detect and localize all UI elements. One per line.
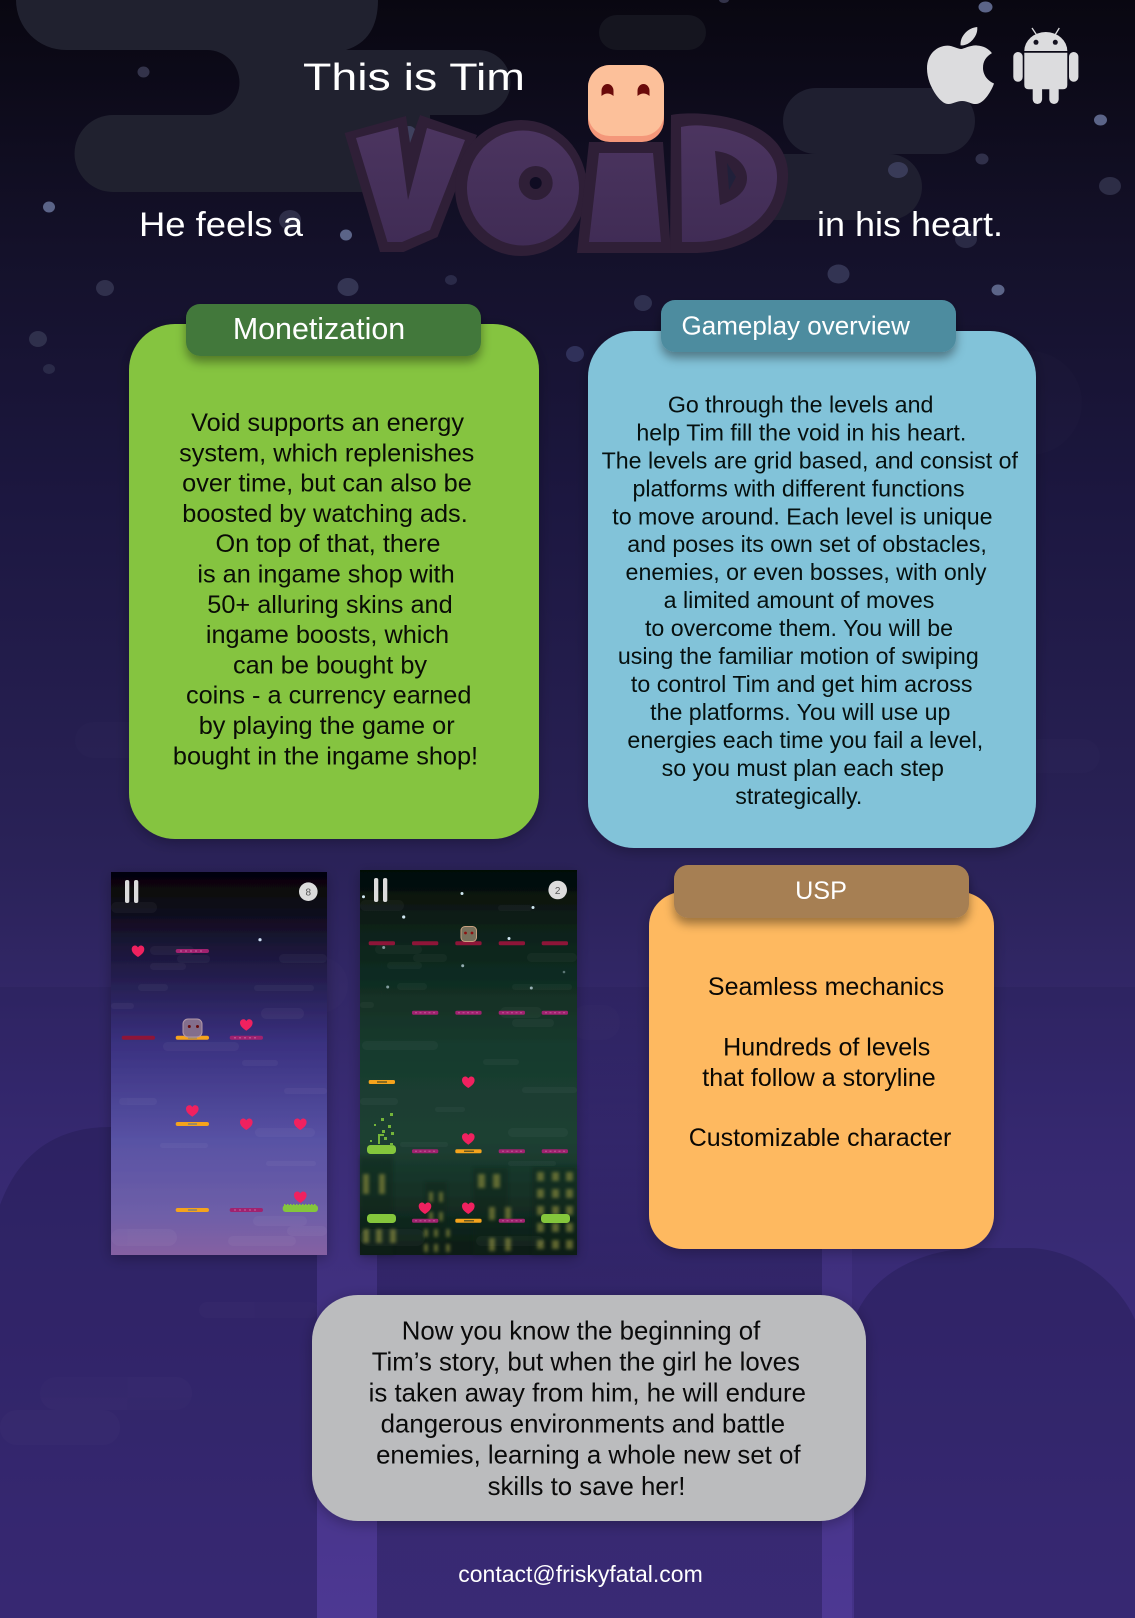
logo letter V: [345, 115, 477, 252]
clouds: [16, 0, 975, 220]
Tim ghost: [461, 926, 476, 942]
text block: gameplay overview: a limited amount of moves: [664, 587, 934, 613]
heading: USP: [674, 865, 969, 918]
text block: monetization: by playing the game or: [199, 712, 455, 740]
panel: USP: [649, 865, 994, 1249]
text block: story: dangerous environments and battle: [381, 1411, 785, 1439]
text block: monetization: ingame boosts, which: [206, 621, 449, 649]
logo letter D: [670, 113, 788, 253]
text block: USP: Seamless mechanics: [708, 973, 944, 1001]
stars: [362, 892, 565, 990]
text block: USP: Customizable character: [689, 1124, 951, 1152]
heading: USP: USP: [795, 877, 847, 905]
text block: USP: [689, 973, 951, 1152]
text block: monetization: over time, but can also be: [182, 470, 472, 498]
heading: monetization: [186, 304, 481, 356]
text block: gameplay overview: strategically.: [735, 783, 862, 809]
move counter: [548, 881, 567, 899]
text block: monetization: Void supports an energy: [191, 409, 464, 437]
contact email: contact@friskyfatal.com: [458, 1561, 703, 1587]
hearts: [132, 946, 307, 1203]
text block: story: [369, 1317, 806, 1501]
grass particles: [370, 1113, 394, 1146]
text block: monetization: coins - a currency earned: [186, 682, 471, 710]
screenshot: purple level: [111, 872, 327, 1255]
text block: monetization: can be bought by: [233, 651, 427, 679]
text block: gameplay overview: Go through the levels and: [668, 391, 933, 417]
city skyline: [360, 1157, 577, 1255]
text block: monetization: [173, 409, 478, 770]
faint clouds in screenshot: [111, 902, 327, 1246]
platforms: [367, 941, 570, 1223]
text block: gameplay overview: to overcome them. You will be: [645, 615, 953, 641]
move counter: [299, 882, 318, 901]
pause button: [125, 880, 138, 903]
heading: gameplay overview: [661, 300, 956, 352]
text block: gameplay overview: help Tim fill the void in his heart.: [636, 419, 966, 445]
move counter: 8: [306, 888, 312, 898]
handwritten text: This is Tim: This is Tim: [303, 57, 525, 99]
heading: monetization: Monetization: [233, 312, 405, 346]
text block: gameplay overview: using the familiar motion of swiping: [618, 643, 979, 669]
pause button: [374, 878, 387, 902]
text block: monetization: system, which replenishes: [179, 439, 474, 467]
faint clouds in screenshot: [360, 900, 577, 1246]
Tim ghost: [183, 1019, 202, 1037]
screenshot: green city level: [360, 870, 577, 1255]
text block: gameplay overview: [602, 391, 1019, 809]
text block: gameplay overview: platforms with different functions: [632, 475, 965, 501]
heading: gameplay overview: Gameplay overview: [682, 310, 910, 340]
text block: gameplay overview: enemies, or even bosses, with only: [626, 559, 987, 585]
text block: monetization: bought in the ingame shop!: [173, 742, 478, 770]
text block: USP: Hundreds of levels: [723, 1034, 930, 1062]
starfield dots: [29, 0, 1121, 374]
text block: gameplay overview: and poses its own set of obstacles,: [627, 531, 987, 557]
handwritten text: in his heart: in his heart.: [817, 206, 1003, 244]
character: Tim: [588, 65, 664, 142]
text block: monetization: is an ingame shop with: [197, 560, 455, 588]
text block: story: is taken away from him, he will endure: [369, 1380, 806, 1408]
text block: story: enemies, learning a whole new set of: [376, 1442, 801, 1470]
text block: story: Now you know the beginning of: [402, 1317, 761, 1345]
panel: story: [312, 1295, 866, 1521]
panel: gameplay overview: [588, 300, 1036, 848]
text block: monetization: boosted by watching ads.: [182, 500, 468, 528]
text block: gameplay overview: so you must plan each step: [662, 755, 944, 781]
panel: monetization: [129, 304, 539, 839]
handwritten text: He feels a: He feels a: [139, 206, 303, 244]
text block: gameplay overview: energies each time you fail a level,: [627, 727, 983, 753]
move counter: 2: [555, 886, 561, 897]
text block: gameplay overview: to control Tim and get him across: [631, 671, 972, 697]
icon: android: [1013, 28, 1078, 104]
text block: gameplay overview: The levels are grid based, and consist of: [602, 447, 1019, 473]
text block: gameplay overview: the platforms. You will use up: [650, 699, 950, 725]
icon: apple: [927, 27, 994, 104]
text block: monetization: On top of that, there: [215, 530, 441, 558]
text block: monetization: 50+ alluring skins and: [207, 591, 453, 619]
hearts: [419, 1077, 475, 1214]
text block: story: skills to save her!: [488, 1473, 685, 1501]
text block: USP: that follow a storyline: [702, 1064, 936, 1092]
logo letter I: [577, 142, 671, 253]
text block: gameplay overview: to move around. Each level is unique: [612, 503, 993, 529]
platforms: [122, 949, 318, 1212]
text block: story: Tim’s story, but when the girl he loves: [372, 1348, 800, 1376]
star: [258, 938, 262, 941]
logo: VOID: [345, 113, 788, 256]
logo letter O: [455, 120, 587, 256]
